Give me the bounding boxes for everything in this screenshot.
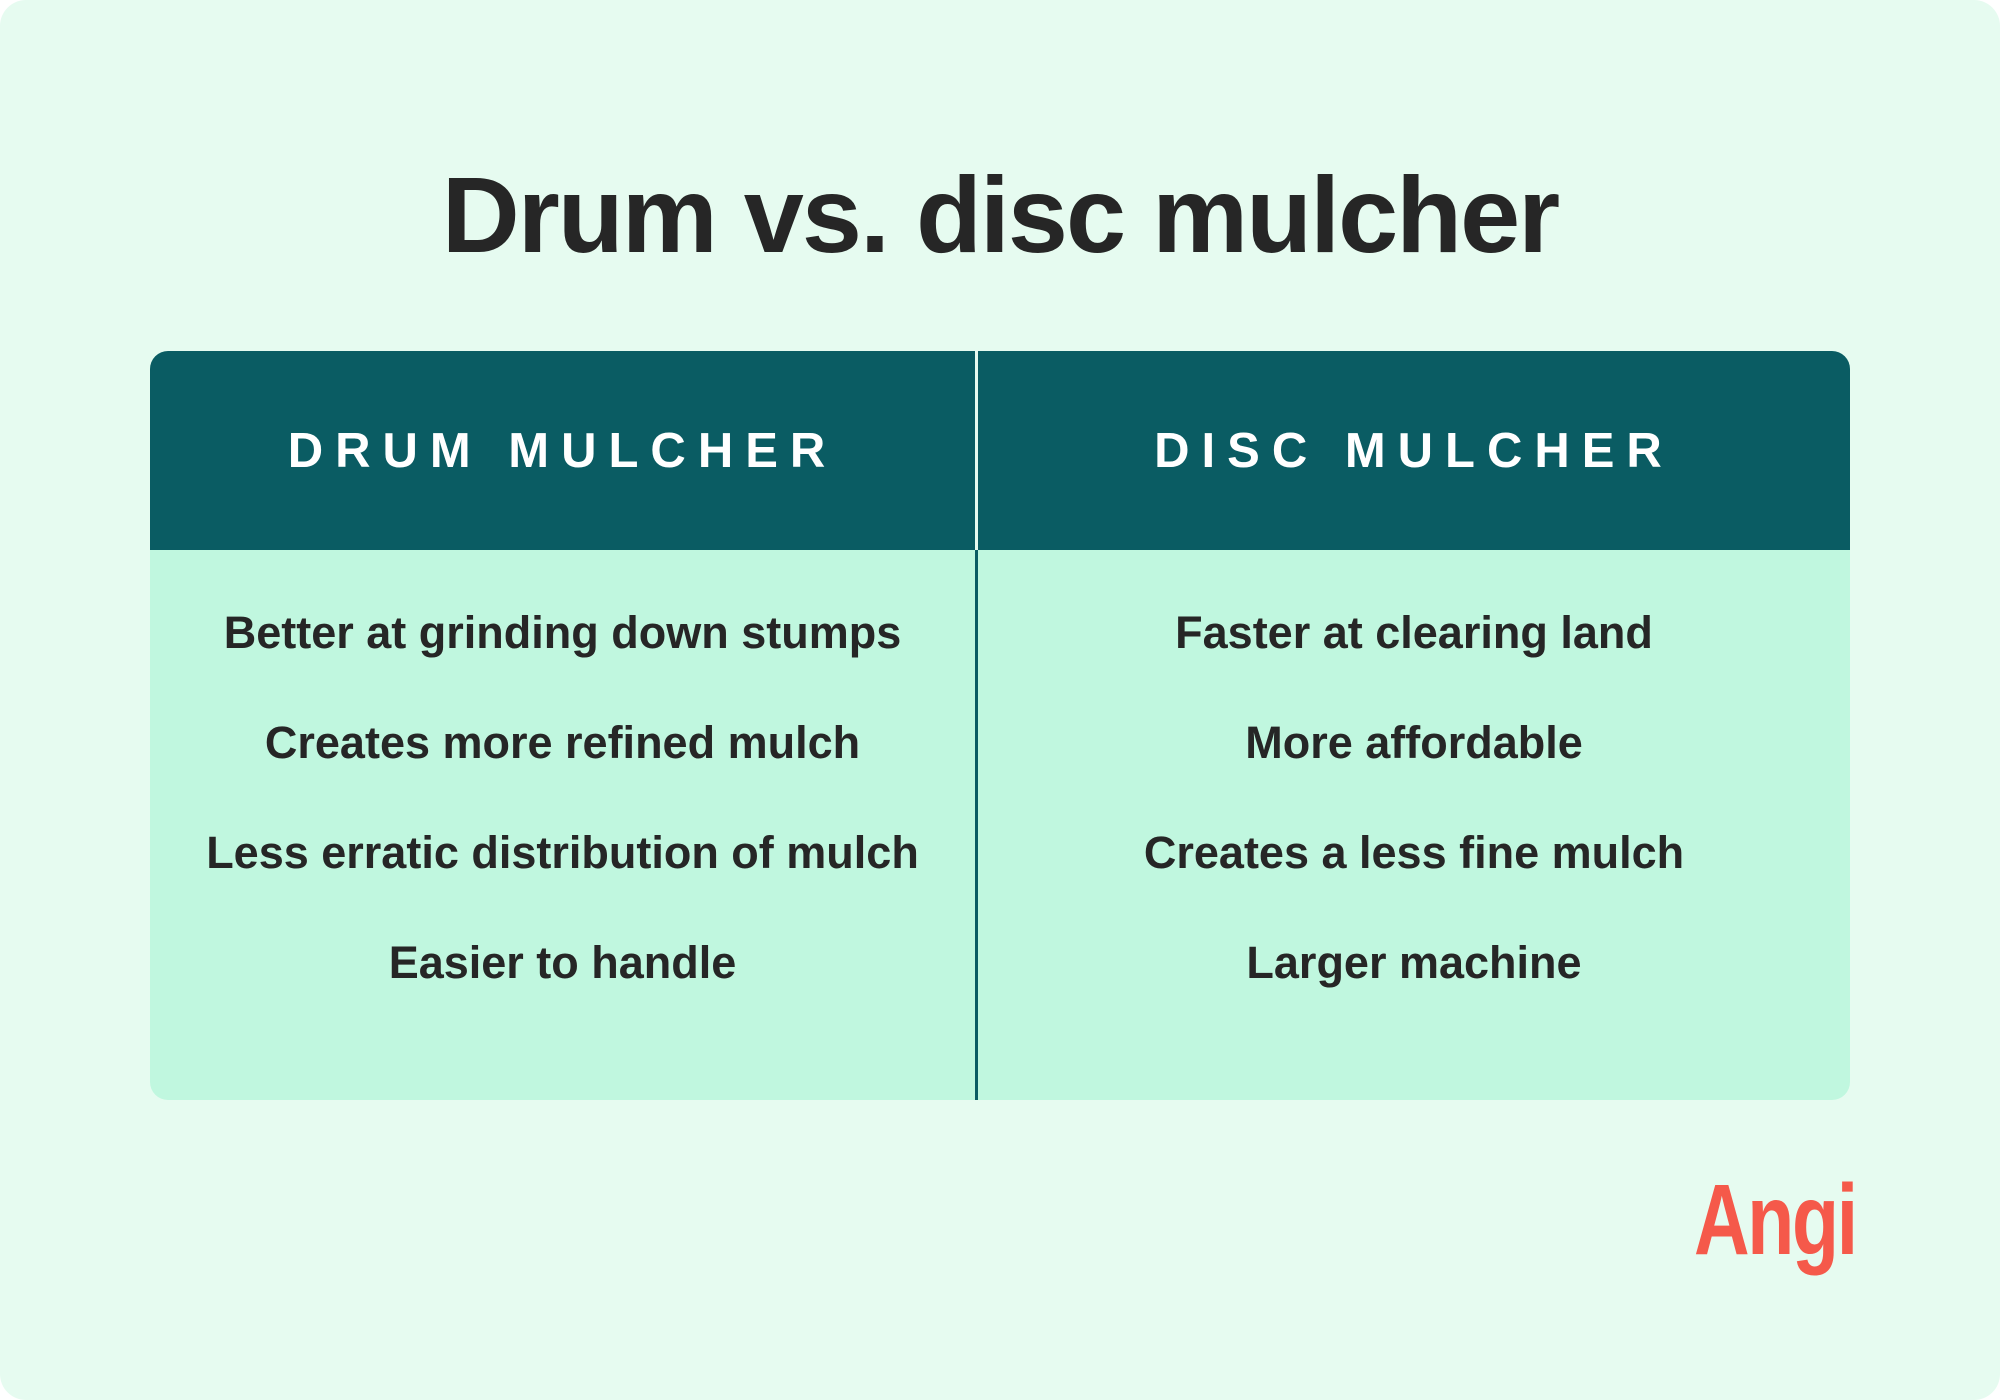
- column: disc mulcher items: Faster at clearing land: [1175, 607, 1653, 658]
- header: disc mulcher: DISC MULCHER: [1154, 424, 1674, 478]
- divider: [975, 351, 978, 1100]
- title: Drum vs. disc mulcher: [442, 154, 1558, 275]
- column: drum mulcher items: [206, 607, 919, 988]
- column: drum mulcher items: Better at grinding down stumps: [224, 607, 901, 658]
- column: disc mulcher items: Larger machine: [1246, 937, 1582, 988]
- column: disc mulcher items: [1144, 607, 1684, 988]
- column: drum mulcher items: Easier to handle: [389, 937, 736, 988]
- comparison table: [150, 351, 1850, 1100]
- column: disc mulcher items: More affordable: [1245, 717, 1583, 768]
- logo: Angi: Angi: [1694, 1164, 1856, 1276]
- header: drum mulcher: DRUM MULCHER: [288, 424, 837, 478]
- column: drum mulcher items: Creates more refined mulch: [265, 717, 860, 768]
- column: disc mulcher items: Creates a less fine mulch: [1144, 827, 1684, 878]
- header: disc mulcher: [978, 351, 1850, 550]
- header: drum mulcher: [150, 351, 975, 550]
- column: drum mulcher items: Less erratic distribution of mulch: [206, 827, 919, 878]
